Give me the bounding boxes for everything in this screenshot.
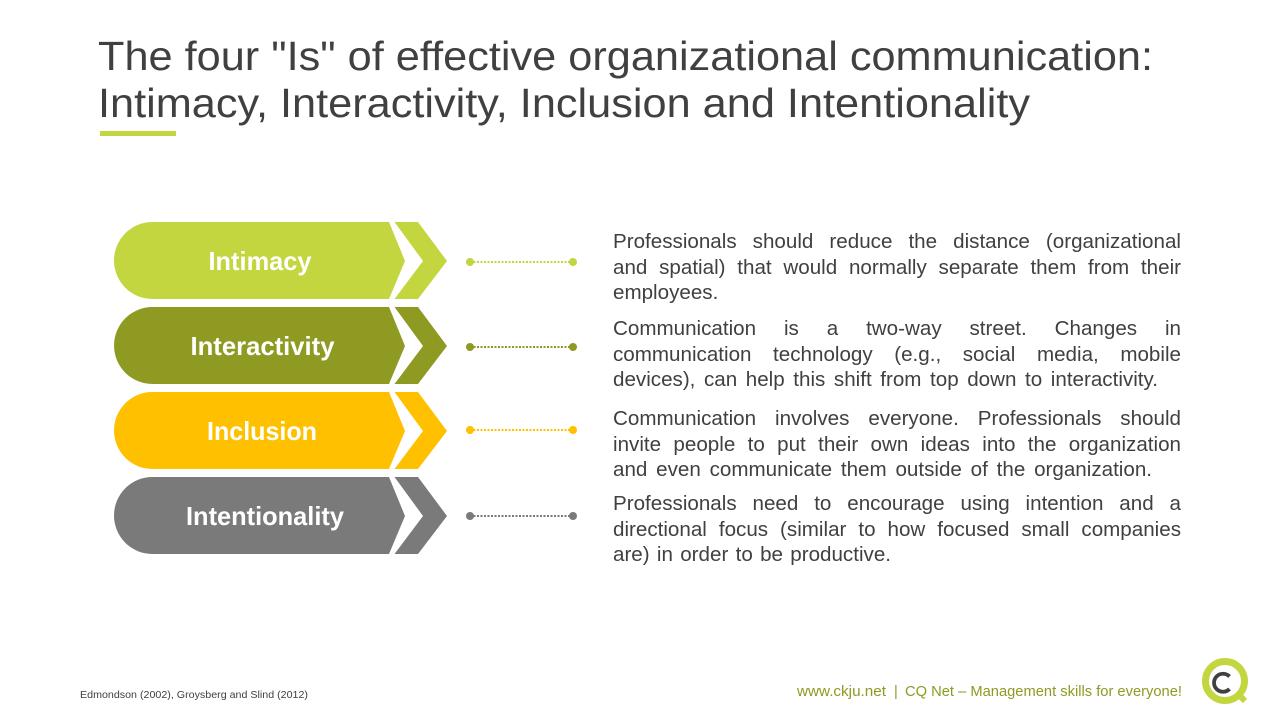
arrow: Intimacy xyxy=(114,222,447,299)
text: Intentionality description: are) in order to be productive. xyxy=(613,543,891,566)
citation: Edmondson (2002), Groysberg and Slind (2012) xyxy=(80,689,308,701)
text: Intentionality description: directional focus (similar to how focused small companies xyxy=(613,518,1181,540)
arrow: Intimacy: Intimacy xyxy=(208,246,312,276)
arrow: Inclusion xyxy=(114,392,447,469)
title: Intimacy, Interactivity, Inclusion and Intentionality xyxy=(98,80,1031,126)
title xyxy=(98,33,1153,126)
text: Inclusion description xyxy=(613,407,1181,481)
connector: Interactivity xyxy=(466,343,577,351)
arrow: Intentionality: Intentionality xyxy=(186,501,345,531)
text: Inclusion description: Communication involves everyone. Professionals should xyxy=(613,407,1181,430)
icon: CQ logo xyxy=(1206,662,1245,701)
text: Intentionality description xyxy=(613,492,1181,566)
connector: Intentionality xyxy=(466,512,577,520)
connector: Intimacy xyxy=(466,258,577,266)
text: Intentionality description: Professionals need to encourage using intention and a xyxy=(613,492,1181,515)
text: Interactivity description: Communication is a two-way street. Changes in xyxy=(613,317,1181,340)
footer tagline: CQ Net – Management skills for everyone! xyxy=(905,684,1182,700)
arrow: Intentionality xyxy=(114,477,447,554)
text: Interactivity description: devices), can help this shift from top down to interactivity. xyxy=(613,368,1158,391)
title accent underline xyxy=(100,131,176,136)
text: Intimacy description: employees. xyxy=(613,281,718,304)
arrow: Inclusion: Inclusion xyxy=(207,416,317,446)
footer tagline: | xyxy=(894,684,898,700)
arrow: Interactivity: Interactivity xyxy=(190,331,335,361)
text: Inclusion description: and even communicate them outside of the organization. xyxy=(613,458,1152,481)
title: The four "Is" of effective organizational communication: xyxy=(98,33,1153,79)
text: Inclusion description: invite people to put their own ideas into the organization xyxy=(613,432,1181,456)
arrow: Interactivity xyxy=(114,307,447,384)
connector: Inclusion xyxy=(466,426,577,434)
footer tagline: www.ckju.net xyxy=(796,684,886,700)
text: Interactivity description: communication technology (e.g., social media, mobile xyxy=(613,342,1181,366)
text: Intimacy description xyxy=(613,230,1181,304)
text: Intimacy description: Professionals should reduce the distance (organizational xyxy=(613,230,1181,253)
text: Intimacy description: and spatial) that would normally separate them from their xyxy=(613,256,1181,278)
text: Interactivity description xyxy=(613,317,1181,391)
